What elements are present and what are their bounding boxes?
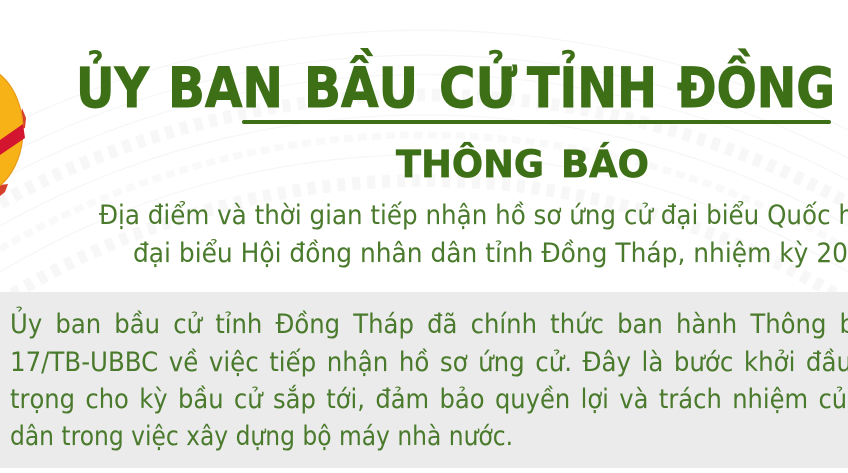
subtitle: THÔNG BÁO: THÔNG xyxy=(396,142,544,186)
title: BAN xyxy=(168,56,283,120)
title: CỬ xyxy=(439,50,517,120)
panel: announcement summary xyxy=(0,292,848,468)
icon: national emblem xyxy=(0,65,26,196)
title: ỦY xyxy=(76,50,150,120)
subtitle: THÔNG BÁO xyxy=(396,142,649,186)
subtitle: THÔNG BÁO: BÁO xyxy=(561,142,649,186)
title: TỈNH xyxy=(527,50,657,120)
description text xyxy=(99,200,848,269)
title xyxy=(76,49,835,120)
title: BẦU xyxy=(304,49,418,120)
body text: dân trong việc xây dựng bộ máy nhà nước. xyxy=(10,421,513,452)
title underline xyxy=(242,120,831,124)
body text xyxy=(10,306,848,452)
